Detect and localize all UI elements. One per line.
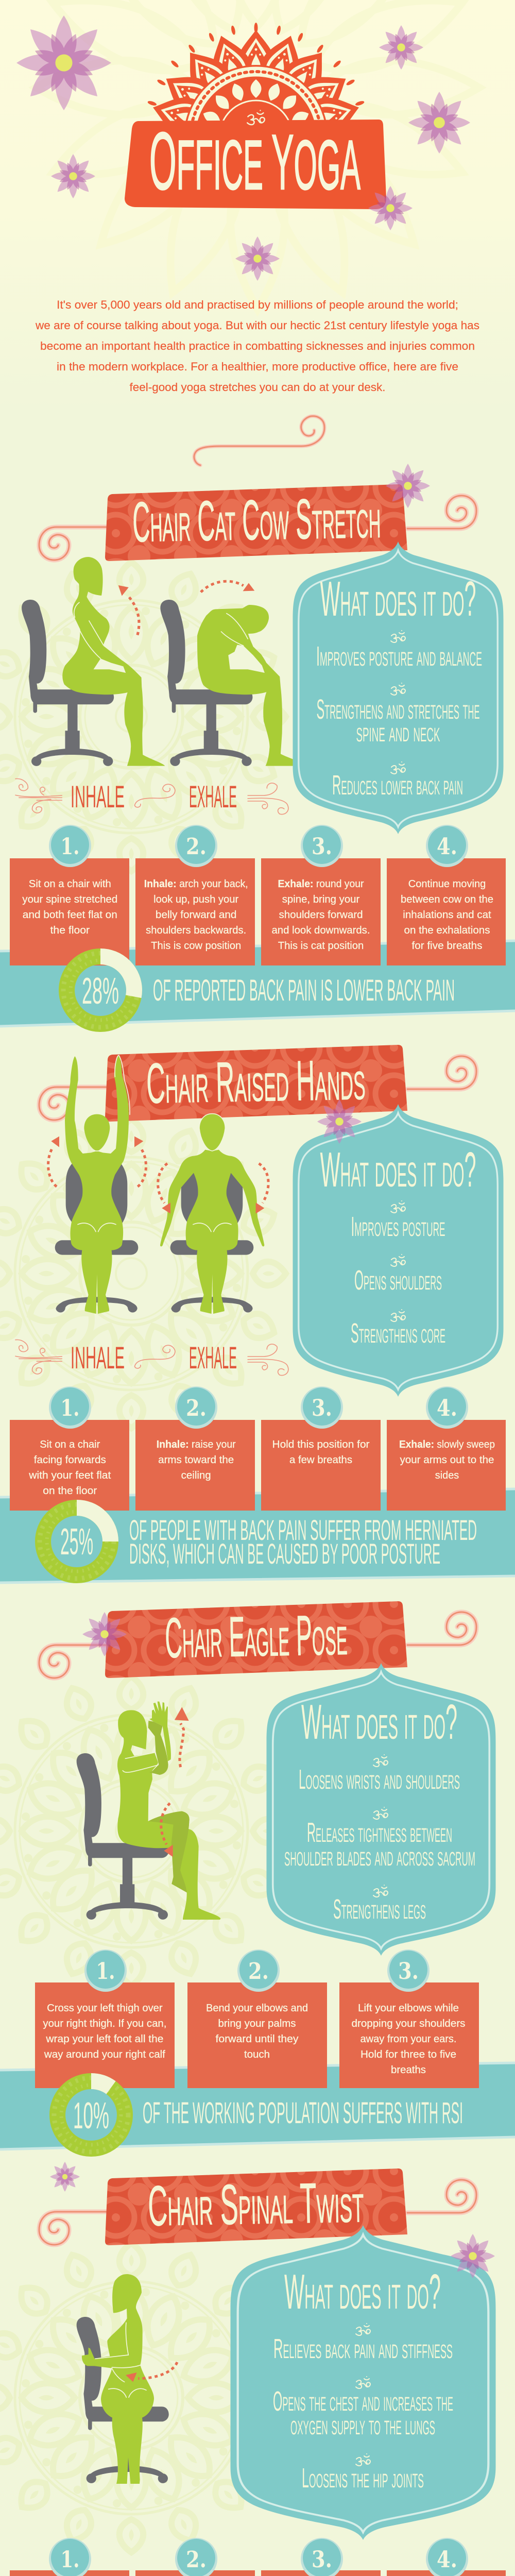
- flower: large top left: [0, 0, 131, 130]
- step 4: Continue moving: [408, 878, 486, 890]
- flower on banner: [73, 1603, 136, 1666]
- figure: exhale: [197, 605, 299, 766]
- step 1: Cross your left thigh over: [47, 2003, 163, 2014]
- step 3: This is cat position: [278, 940, 364, 952]
- intro text: we are of course talking about yoga. But with our hectic 21st century lifestyle yoga has: [35, 319, 479, 332]
- step 2: [187, 1950, 327, 2088]
- chair: [77, 2317, 169, 2483]
- step 3: shoulders forward: [279, 909, 363, 921]
- step 1: 1.: [61, 834, 79, 860]
- heading banner: [105, 484, 407, 561]
- flower: on banner corner: [359, 177, 422, 240]
- donut chart: 25%: [40, 1504, 114, 1579]
- figure: inhale: [62, 557, 165, 766]
- heading banner: [105, 2168, 407, 2245]
- intro text: feel-good yoga stretches you can do at your desk.: [130, 381, 385, 394]
- step 1: Sit on a chair: [40, 1439, 100, 1450]
- step 1: Sit on a chair with: [29, 878, 111, 890]
- figure: inhale: [55, 1055, 138, 1314]
- stat band: [0, 941, 515, 1026]
- callout: what does it do: [293, 541, 504, 834]
- step 3: Lift your elbows while: [358, 2003, 459, 2014]
- step 1: your spine stretched: [22, 894, 117, 905]
- step 3: away from your ears.: [360, 2033, 456, 2045]
- callout: what does it do: [267, 1663, 495, 1956]
- step 4: 4.: [437, 2547, 457, 2573]
- section: chair raised hands: INHALE: [71, 1341, 125, 1375]
- step 3: a few breaths: [289, 1454, 352, 1466]
- flower between banner and panel: [308, 1090, 371, 1153]
- section: chair spinal twist: [0, 2112, 515, 2576]
- step 2: Inhale: arch your back,: [144, 878, 248, 890]
- flower on panel: [441, 2225, 504, 2287]
- section: chair cat cow stretch: EXHALE: [189, 779, 237, 814]
- callout: what does it do: [231, 2225, 495, 2540]
- stat text: [129, 1514, 477, 1570]
- swirl left: [39, 1087, 108, 1120]
- step 4: on the exhalations: [404, 925, 490, 936]
- step 3: spine, bring your: [282, 894, 360, 905]
- step 3: Hold for three to five: [360, 2049, 456, 2060]
- step 3: 3.: [398, 1958, 419, 1985]
- swirl left: [39, 2212, 108, 2245]
- step 4: inhalations and cat: [403, 909, 491, 921]
- step 2: forward until they: [215, 2033, 299, 2045]
- step 1: 1.: [96, 1958, 115, 1985]
- step 2: belly forward and: [156, 909, 236, 921]
- arrows: [118, 581, 254, 635]
- intro text: become an important health practice in combatting sicknesses and injuries common: [40, 340, 475, 352]
- swirl left: [39, 527, 108, 560]
- swirl right: [407, 1056, 476, 1089]
- step 2: [135, 2538, 255, 2576]
- donut chart: 25%: 25%: [60, 1521, 93, 1563]
- swirl right: [407, 496, 476, 529]
- step 2: 2.: [248, 1958, 269, 1985]
- small flower: [44, 2156, 86, 2198]
- swirl left: [39, 1645, 108, 1678]
- step 4: 4.: [437, 1395, 457, 1421]
- section: chair eagle pose: [0, 1546, 515, 2152]
- figure: exhale: [160, 1114, 264, 1314]
- step 3: [261, 2538, 381, 2576]
- step 2: [135, 825, 255, 965]
- background mandala: [0, 2112, 417, 2576]
- title banner: [125, 116, 386, 209]
- step 4: [387, 1386, 506, 1511]
- faint header mandala pattern: [0, 0, 515, 497]
- chair: [77, 1753, 169, 1920]
- intro text: in the modern workplace. For a healthier, more productive office, here are five: [57, 360, 458, 373]
- step 4: your arms out to the: [400, 1454, 494, 1466]
- step 3: 3.: [312, 1395, 332, 1421]
- section: chair cat cow stretch: INHALE: [71, 779, 125, 814]
- arrows: [48, 1137, 268, 1214]
- step 1: and both feet flat on: [23, 909, 117, 921]
- section: chair cat cow stretch: [0, 431, 515, 1027]
- arrows: [161, 1707, 189, 1857]
- step 2: ceiling: [181, 1470, 211, 1481]
- step 2: look up, push your: [153, 894, 239, 905]
- step 2: touch: [244, 2049, 270, 2060]
- intro text: [35, 298, 479, 394]
- step 3: [339, 1950, 479, 2088]
- step 2: [135, 1386, 255, 1511]
- section: chair raised hands: EXHALE: [189, 1341, 237, 1375]
- step 2: 2.: [186, 1395, 207, 1421]
- step 2: This is cow position: [151, 940, 241, 952]
- arrow: [126, 2362, 177, 2382]
- icon: om on banner: [247, 110, 265, 125]
- step 3: dropping your shoulders: [351, 2018, 466, 2029]
- step 3: Hold this position for: [272, 1439, 370, 1450]
- step 3: Exhale: round your: [278, 878, 364, 890]
- step 1: 1.: [61, 1395, 79, 1421]
- step 1: [10, 1386, 129, 1511]
- step 3: 3.: [312, 834, 332, 860]
- step 1: [35, 1950, 175, 2088]
- step 4: between cow on the: [401, 894, 493, 905]
- stat band: [0, 1489, 515, 1583]
- background mandala: [0, 431, 417, 1002]
- donut chart: 10%: 10%: [73, 2095, 109, 2137]
- step 3: [261, 825, 381, 965]
- donut chart: 10%: [54, 2078, 128, 2152]
- heading banner: [105, 1045, 407, 1122]
- background mandala: [0, 1546, 417, 2116]
- step 2: 2.: [186, 834, 207, 860]
- flourishes: [15, 778, 288, 815]
- step 4: 4.: [437, 834, 457, 860]
- step 1: with your feet flat: [28, 1470, 111, 1481]
- step 2: 2.: [186, 2547, 207, 2573]
- callout: what does it do: [293, 1104, 504, 1397]
- flower: centre: [226, 227, 289, 290]
- chair exhale: [160, 600, 252, 766]
- step 4: [387, 825, 506, 965]
- swirl divider: [194, 416, 324, 465]
- figure: eagle pose: [117, 1702, 220, 1920]
- step 3: breaths: [391, 2064, 426, 2076]
- step 4: Exhale: slowly sweep: [399, 1439, 495, 1450]
- step 1: 1.: [61, 2547, 79, 2573]
- step 1: facing forwards: [34, 1454, 106, 1466]
- step 3: and look downwards.: [272, 925, 370, 936]
- background mandala: [0, 988, 417, 1559]
- step 4: sides: [435, 1470, 459, 1481]
- step 4: for five breaths: [412, 940, 482, 952]
- step 2: Bend your elbows and: [206, 2003, 308, 2014]
- step 4: [387, 2538, 506, 2576]
- main title: OFFICE YOGA: [149, 116, 360, 207]
- step 3: 3.: [312, 2547, 332, 2573]
- step 3: [261, 1386, 381, 1511]
- flower on banner: [376, 454, 439, 517]
- step 1: the floor: [50, 925, 90, 936]
- heading banner: [105, 1601, 407, 1678]
- step 1: [10, 2538, 129, 2576]
- step 1: way around your right calf: [44, 2049, 165, 2060]
- flower: top right: [370, 16, 433, 79]
- flower: right: [396, 79, 483, 166]
- title mandala: [147, 23, 365, 121]
- step 2: shoulders backwards.: [146, 925, 246, 936]
- step 1: on the floor: [43, 1485, 97, 1497]
- stat band: [0, 2063, 515, 2149]
- header: [16, 15, 470, 281]
- chair inhale: [22, 600, 114, 766]
- donut chart: 28%: [63, 953, 138, 1027]
- step 2: arms toward the: [158, 1454, 234, 1466]
- section: chair raised hands: [0, 988, 515, 1583]
- intro text: It's over 5,000 years old and practised by millions of people around the world;: [57, 298, 458, 311]
- step 1: your right thigh. If you can,: [43, 2018, 166, 2029]
- donut chart: 28%: 28%: [82, 971, 119, 1012]
- swirl right: [407, 2180, 476, 2213]
- swirl right: [407, 1612, 476, 1645]
- figure: spinal twist: [82, 2274, 154, 2484]
- step 1: wrap your left foot all the: [45, 2033, 163, 2045]
- step 2: bring your palms: [218, 2018, 296, 2029]
- step 2: Inhale: raise your: [157, 1439, 236, 1450]
- step 1: [10, 825, 129, 965]
- flower: left: [42, 145, 105, 208]
- flourishes: [15, 1340, 288, 1376]
